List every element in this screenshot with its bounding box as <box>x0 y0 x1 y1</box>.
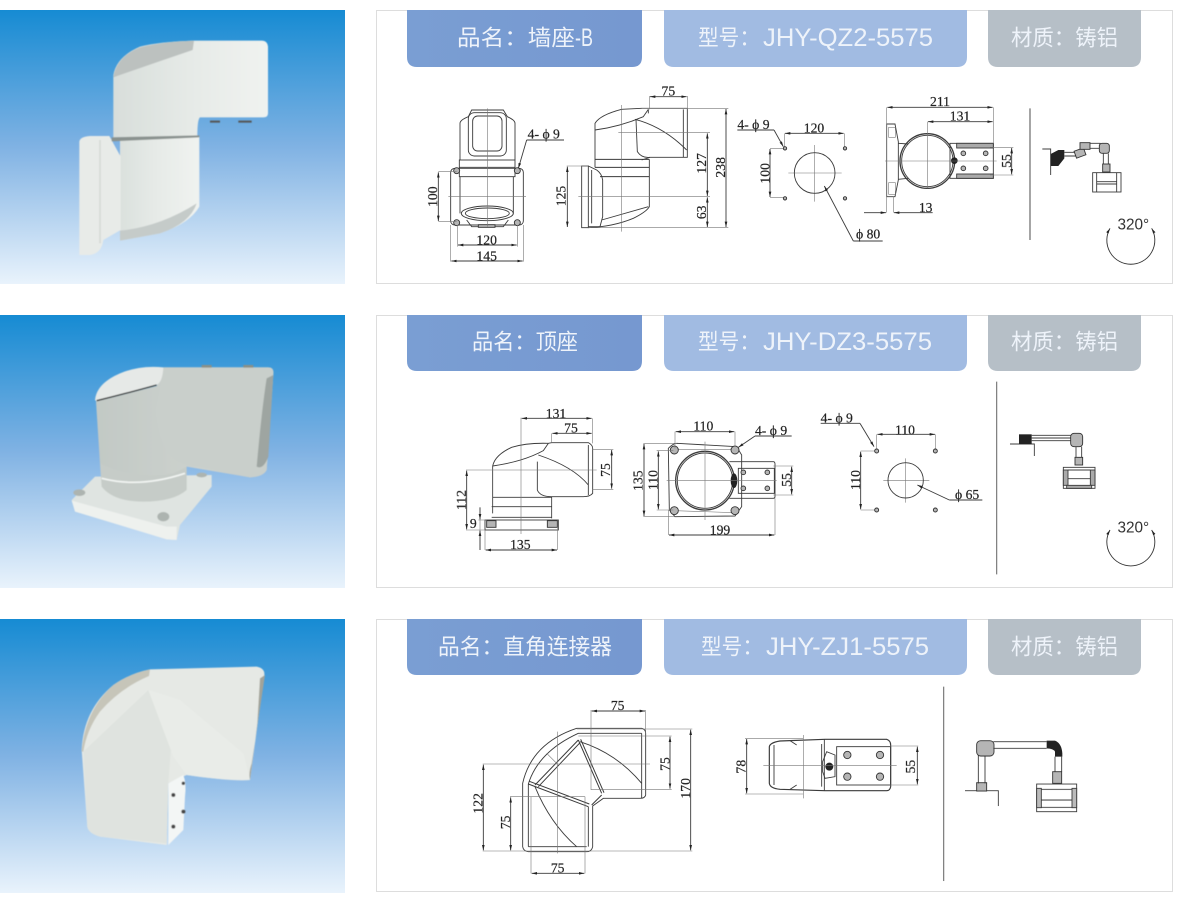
rotation indicator <box>1107 519 1155 566</box>
drawing: hole pattern and top view: 211 <box>930 94 950 109</box>
row 1: wall mount B <box>0 10 1172 284</box>
tab: name <box>407 619 642 675</box>
spec panel: ceiling mount <box>376 315 1172 588</box>
small arm schematic <box>1042 143 1121 192</box>
tab: model <box>664 619 967 675</box>
tab: model <box>664 10 967 67</box>
rotation indicator <box>1107 216 1155 264</box>
drawing: hole pattern and top view: 4- ϕ 9 <box>737 117 770 132</box>
tab: name: 品名：顶座 <box>472 330 578 354</box>
tab: name: 品名：墙座 <box>457 26 575 50</box>
tab: model <box>664 315 967 371</box>
drawing: front and side views: 4- ϕ 9 <box>528 127 560 142</box>
spec panel: wall mount B <box>376 10 1172 284</box>
drawing: hole pattern and schematic: ϕ 65 <box>955 487 979 502</box>
drawing: hole pattern and top view: 100 <box>757 163 772 184</box>
drawing: side and top views: 112 <box>454 490 469 510</box>
drawing: elbow side view: 75 <box>657 757 672 771</box>
drawing: side and top views: 4- ϕ 9 <box>755 423 787 438</box>
row 2: ceiling mount <box>0 315 1172 588</box>
drawing: front and side views: 127 <box>694 153 709 174</box>
drawing: elbow side view: 75 <box>611 698 625 713</box>
rotation indicator: 320° <box>1117 216 1149 233</box>
drawing: hole pattern and top view: 120 <box>804 120 824 135</box>
drawing: hole pattern and schematic <box>821 382 1155 574</box>
drawing: elbow side view: 75 <box>551 861 565 876</box>
tab: model: JHY-DZ3-5575 <box>763 328 932 356</box>
drawing: side and top views: 110 <box>646 470 661 490</box>
tab: material <box>988 10 1141 67</box>
divider <box>942 687 945 881</box>
drawing: hole pattern and top view: 131 <box>950 109 970 124</box>
drawing: front and side views: 75 <box>662 84 675 99</box>
product photo: wall mount B <box>0 10 345 284</box>
drawing: side and top views: 131 <box>546 406 566 421</box>
tab: material: 材质：铸铝 <box>1011 634 1118 660</box>
small arm schematic <box>1010 433 1095 488</box>
tab: model: JHY-ZJ1-5575 <box>766 633 929 661</box>
drawing: elbow side view <box>471 698 693 876</box>
drawing: side and top views: 75 <box>598 463 613 477</box>
tab: material <box>988 619 1141 675</box>
tab: model: 型号： <box>698 330 760 354</box>
drawing: elbow top view and schematic <box>733 687 1077 881</box>
drawing: front and side views: 120 <box>476 233 497 248</box>
divider <box>995 382 998 574</box>
drawing: front and side views: 63 <box>694 205 709 219</box>
tab: name <box>407 315 642 371</box>
drawing: elbow side view: 75 <box>498 815 513 829</box>
tab: material <box>988 315 1141 371</box>
spec panel: right-angle connector <box>376 619 1172 892</box>
drawing: front and side views: 125 <box>554 186 569 206</box>
drawing: side and top views: 110 <box>693 419 713 434</box>
drawing: side and top views: 135 <box>510 537 531 552</box>
drawing: side and top views: 75 <box>564 420 578 435</box>
drawing: side and top views <box>454 406 794 552</box>
drawing: elbow side view: 122 <box>471 793 486 814</box>
drawing: elbow side view: 170 <box>678 778 693 799</box>
drawing: elbow top view and schematic: 55 <box>903 760 918 773</box>
drawing: hole pattern and schematic: 110 <box>895 422 915 437</box>
drawing: front and side views <box>425 84 728 263</box>
drawing: hole pattern and top view: 55 <box>999 154 1014 168</box>
tab: material: 材质：铸铝 <box>1011 26 1118 50</box>
drawing: front and side views: 145 <box>476 248 497 263</box>
tab: material: 材质：铸铝 <box>1011 330 1118 354</box>
tab: model: 型号： <box>698 26 760 50</box>
tab: name <box>407 10 642 67</box>
tab: name: -B <box>575 24 593 52</box>
drawing: elbow top view and schematic: 78 <box>733 760 748 773</box>
product photo: right-angle connector <box>0 619 345 893</box>
tab: model: 型号： <box>701 634 763 660</box>
row 3: right-angle connector <box>0 619 1172 893</box>
drawing: hole pattern and schematic: 4- ϕ 9 <box>821 410 853 425</box>
product photo: ceiling mount <box>0 315 345 588</box>
drawing: hole pattern and schematic: 110 <box>848 470 863 490</box>
drawing: side and top views: 9 <box>470 516 477 531</box>
drawing: side and top views: 55 <box>779 473 794 487</box>
tab: name: 品名：直角连接器 <box>438 634 612 660</box>
drawing: hole pattern and top view: ϕ 80 <box>856 227 880 242</box>
rotation indicator: 320° <box>1117 519 1149 536</box>
drawing: front and side views: 100 <box>425 186 440 207</box>
divider <box>1028 108 1032 240</box>
drawing: front and side views: 238 <box>713 157 728 178</box>
drawing: side and top views: 199 <box>710 522 730 537</box>
drawing: side and top views: 135 <box>631 470 646 491</box>
small arm schematic <box>965 741 1077 812</box>
drawing: hole pattern and top view: 13 <box>919 200 933 215</box>
drawing: hole pattern and top view <box>737 94 1155 264</box>
tab: model: JHY-QZ2-5575 <box>763 24 933 52</box>
